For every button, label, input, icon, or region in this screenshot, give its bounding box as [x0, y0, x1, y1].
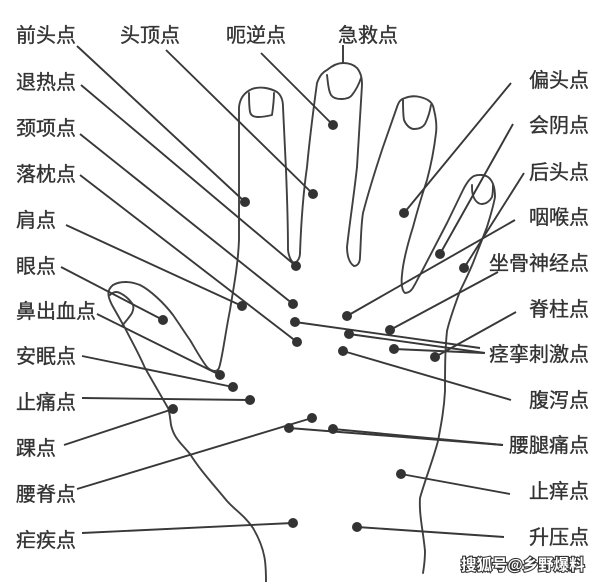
fingernails: [110, 75, 493, 326]
point: 腰脊点: [16, 413, 317, 506]
point: 后头点: [459, 161, 589, 273]
point: 脊柱点: 脊柱点: [529, 298, 589, 321]
point: 呃逆点: [226, 24, 338, 130]
point: 落枕点: [16, 163, 302, 347]
point: 坐骨神经点: 坐骨神经点: [489, 252, 589, 275]
point: 肩点: 肩点: [16, 209, 56, 232]
point: 偏头点: 偏头点: [529, 69, 589, 92]
point: 升压点: 升压点: [529, 526, 589, 549]
point: 腰腿痛点: [284, 423, 589, 457]
point: 前头点: [16, 24, 250, 207]
point: 疟疾点: 疟疾点: [16, 529, 76, 552]
point: 急救点: [338, 24, 398, 63]
point: 退热点: [16, 71, 301, 271]
point: 腹泻点: [338, 346, 589, 412]
watermark: 搜狐号@乡野爆料: [461, 555, 585, 574]
point: 前头点: 前头点: [16, 24, 76, 47]
point: 头顶点: 头顶点: [120, 24, 180, 47]
point: 咽喉点: [342, 206, 589, 321]
point: 踝点: [16, 404, 178, 460]
point: 腰脊点: 腰脊点: [16, 483, 76, 506]
point: 疟疾点: [16, 518, 298, 552]
point: 会阴点: 会阴点: [529, 114, 589, 137]
point: 偏头点: [399, 69, 589, 218]
point: 安眠点: 安眠点: [16, 345, 76, 368]
point: 肩点: [16, 209, 247, 311]
point: 眼点: 眼点: [16, 255, 56, 278]
point: 头顶点: [120, 24, 318, 199]
point: 安眠点: [16, 345, 238, 392]
point: 脊柱点: [430, 298, 589, 362]
point: 急救点: 急救点: [338, 24, 398, 47]
point: 止痛点: 止痛点: [16, 391, 76, 414]
point: 咽喉点: 咽喉点: [529, 206, 589, 229]
point: 升压点: [352, 522, 589, 549]
hand outline: [108, 63, 495, 582]
point: 止痛点: [16, 391, 255, 414]
point: 坐骨神经点: [385, 252, 589, 335]
point: 颈项点: [16, 117, 298, 309]
point: 腹泻点: 腹泻点: [529, 389, 589, 412]
point: 痉挛刺激点: [290, 317, 589, 366]
point: 落枕点: 落枕点: [16, 163, 76, 186]
point: 腰腿痛点: 腰腿痛点: [509, 434, 589, 457]
point: 会阴点: [435, 114, 589, 259]
point: 止痒点: [396, 469, 589, 503]
point: 痉挛刺激点: 痉挛刺激点: [489, 343, 589, 366]
point: 后头点: 后头点: [529, 161, 589, 184]
point: 鼻出血点: 鼻出血点: [16, 300, 96, 323]
point: 呃逆点: 呃逆点: [226, 24, 286, 47]
point: 止痒点: 止痒点: [529, 480, 589, 503]
point: 颈项点: 颈项点: [16, 117, 76, 140]
point: 眼点: [16, 255, 168, 325]
point: 退热点: 退热点: [16, 71, 76, 94]
point: 鼻出血点: [16, 300, 225, 380]
point: 踝点: 踝点: [16, 437, 56, 460]
